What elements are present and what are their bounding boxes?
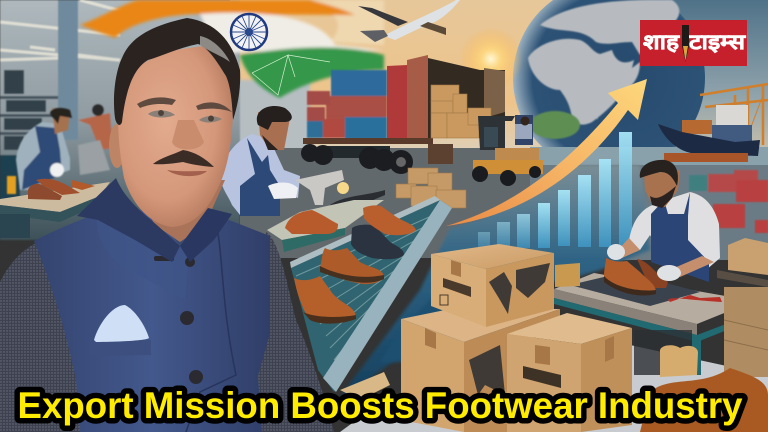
sky background <box>230 0 560 170</box>
port crane <box>700 84 768 145</box>
bar chart hologram <box>478 132 632 252</box>
eyebrows <box>137 97 176 108</box>
lips <box>167 170 207 176</box>
right collar <box>180 208 232 262</box>
speaker portrait <box>0 18 334 432</box>
logo: Shah Times: शाह <box>643 30 680 54</box>
stitching machine <box>295 170 344 205</box>
world map on globe <box>528 0 679 125</box>
sea strip <box>530 147 768 167</box>
trees <box>530 111 580 139</box>
vest <box>34 210 270 432</box>
face <box>118 45 233 227</box>
factory background worker <box>78 113 113 150</box>
middle worker <box>220 106 385 216</box>
dark under table <box>634 330 692 375</box>
shoe: tan far <box>363 205 416 235</box>
conveyor belt <box>290 196 452 392</box>
cargo ship <box>658 105 760 162</box>
ruler and pen on table bottom <box>340 372 390 400</box>
right sky <box>560 0 768 170</box>
icon: Ashoka chakra <box>231 14 267 50</box>
eyes <box>148 110 175 118</box>
left collar <box>77 178 180 262</box>
neck <box>130 180 225 242</box>
machine <box>78 140 110 175</box>
pale factory behind worker <box>230 80 310 170</box>
carton: top with world map <box>431 244 554 327</box>
shoe: tan left <box>294 276 356 323</box>
factory background <box>0 0 240 240</box>
carton pile <box>396 168 466 208</box>
cartons in centre <box>401 244 632 432</box>
worker shirt <box>629 192 720 270</box>
network lines on flag <box>252 55 330 95</box>
logo: Shah Times: टाइम्स <box>688 30 746 54</box>
right work table <box>554 272 754 376</box>
red pliers <box>668 295 722 302</box>
road <box>240 148 530 258</box>
worker apron <box>651 192 709 282</box>
airplane <box>358 0 460 42</box>
shoes on left table <box>28 184 62 200</box>
truck <box>301 55 505 174</box>
leather cloth <box>640 345 768 432</box>
Indian flag banner <box>80 0 384 98</box>
left work table <box>0 179 110 238</box>
growth arrow <box>446 79 647 226</box>
icon: pen nib <box>682 25 689 62</box>
sleeves <box>0 243 80 432</box>
shipping container with cartons <box>387 65 407 138</box>
forklift with cartons <box>472 115 543 186</box>
carton: left <box>401 309 560 432</box>
boxes on right shelf <box>717 238 768 377</box>
right worker <box>616 160 720 282</box>
hair <box>114 18 240 125</box>
moustache <box>153 150 214 167</box>
left worker <box>7 108 110 194</box>
floor <box>340 345 768 432</box>
container stack <box>307 70 387 139</box>
shoe on middle table <box>285 210 338 234</box>
small box on table <box>555 263 580 287</box>
shoe: black <box>351 225 404 259</box>
logo: Shah Times <box>640 20 747 66</box>
gloves <box>607 244 625 260</box>
hologram floor <box>340 165 650 400</box>
middle table <box>267 200 384 252</box>
quay floor <box>530 165 768 260</box>
red crates right <box>689 170 768 233</box>
worker face <box>644 170 680 207</box>
worker forearms <box>616 238 640 258</box>
worker hair <box>640 160 678 186</box>
globe <box>513 0 705 174</box>
icon: spool <box>7 176 16 194</box>
shoe on right table <box>604 244 681 296</box>
factory pillar <box>58 0 78 140</box>
carton: right <box>507 313 632 432</box>
title: Export Mission Boosts Footwear Industry <box>18 385 743 426</box>
nose <box>172 120 204 150</box>
vest buttons <box>154 256 203 384</box>
ears <box>109 124 125 168</box>
sun glare <box>459 27 523 91</box>
pocket flap <box>90 339 151 356</box>
pocket square <box>94 305 149 342</box>
shoes on conveyor <box>294 205 416 324</box>
shoe: tan middle <box>320 248 384 284</box>
